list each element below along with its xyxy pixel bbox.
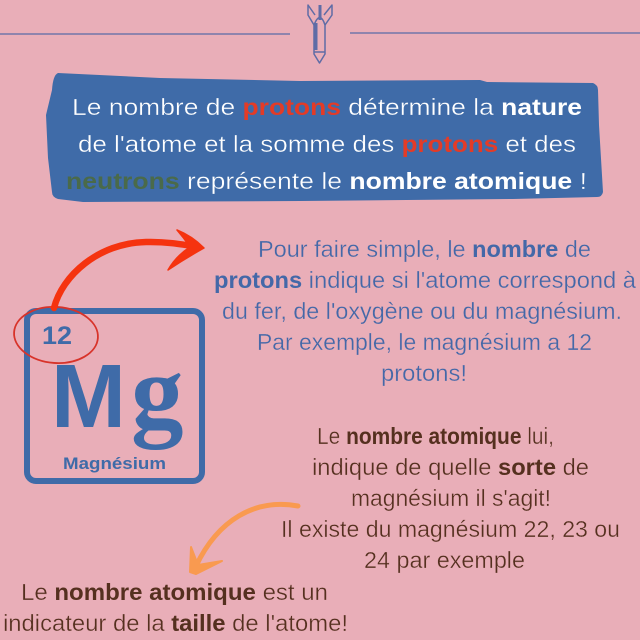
arrow: orange [190,504,298,574]
atomic number: 12 [42,322,72,350]
text block: protons explanation: protons! [381,360,467,386]
element symbol: M [51,347,126,447]
element name: Magnésium [63,454,166,473]
arrow: red [54,230,204,308]
text block: nombre atomique explanation: 24 par exemple [364,547,525,573]
banner text: de l'atome et la somme des protons et des [78,131,576,157]
text block: nombre atomique explanation: Le nombre atomique lui, [317,423,554,449]
text block: nombre atomique explanation [281,423,620,573]
text block: protons explanation: Pour faire simple, le nombre de [258,236,591,262]
text block: size indicator [3,579,348,636]
text block: protons explanation: Par exemple, le magnésium a 12 [257,329,592,355]
text block: nombre atomique explanation: magnésium il s'agit! [351,485,551,511]
banner text: neutrons représente le nombre atomique ! [66,168,587,194]
element symbol: g [131,333,184,450]
text block: protons explanation [214,236,637,386]
text block: nombre atomique explanation: Il existe du magnésium 22, 23 ou [281,516,620,542]
text block: size indicator: Le nombre atomique est un [21,579,328,605]
icon: rocket [308,5,332,63]
text block: protons explanation: du fer, de l'oxygène ou du magnésium. [222,298,622,324]
panel: intro banner [46,73,603,202]
text block: nombre atomique explanation: indique de quelle sorte de [312,454,589,480]
text block: size indicator: indicateur de la taille de l'atome! [3,610,348,636]
banner text: Le nombre de protons détermine la nature [72,94,582,120]
text block: protons explanation: protons indique si l'atome correspond à [214,267,637,293]
circle around atomic number [12,304,100,366]
banner text [66,94,587,194]
icon: magnesium element tile [27,311,202,481]
